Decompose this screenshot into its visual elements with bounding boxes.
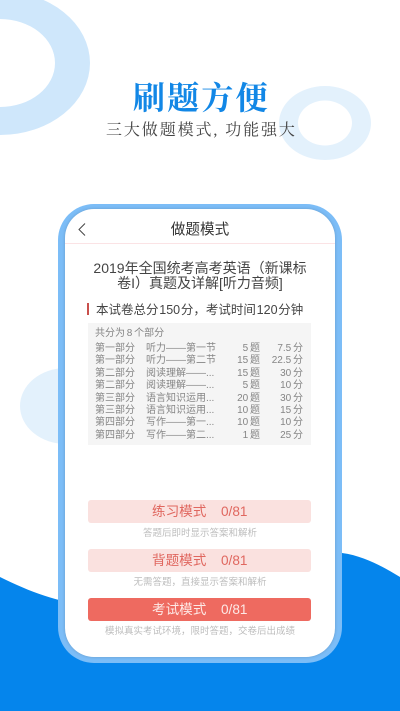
table row 5: 第三部分 <box>95 393 135 404</box>
large ring <box>0 0 90 135</box>
table row 3: 15 题 <box>237 368 260 379</box>
table row 4: 5 题 <box>243 380 260 391</box>
table row 5: 30 分 <box>280 393 303 404</box>
table row 1: 听力——第一节 <box>146 343 216 354</box>
table row 7 <box>95 416 303 428</box>
exam title <box>93 260 307 291</box>
exam mode button <box>88 598 311 621</box>
table row 3 <box>95 367 303 379</box>
header divider <box>65 243 335 244</box>
table row 6 <box>95 404 303 416</box>
table row 4 <box>95 379 303 391</box>
table row 2: 22.5 分 <box>272 355 303 366</box>
practice mode button: 0/81 <box>221 504 247 519</box>
table row 5: 20 题 <box>237 393 260 404</box>
table row 2: 听力——第二节 <box>146 355 216 366</box>
practice mode button <box>88 500 311 523</box>
phone frame <box>58 204 342 663</box>
table row 1 <box>95 342 303 354</box>
score table <box>88 323 311 445</box>
table row 2: 15 题 <box>237 355 260 366</box>
memorize mode button: 背题模式 <box>152 553 206 568</box>
subtitle: 三大做题模式, 功能强大 <box>106 122 297 139</box>
accent bar <box>87 303 89 315</box>
phone screen <box>65 209 335 657</box>
table row 2: 第一部分 <box>95 355 135 366</box>
exam title: 2019年全国统考高考英语（新课标 <box>93 260 307 276</box>
memorize mode button: 0/81 <box>221 553 247 568</box>
table row 1: 第一部分 <box>95 343 135 354</box>
exam mode caption: 模拟真实考试环境，限时答题，交卷后出成绩 <box>105 626 295 637</box>
small ring <box>279 86 371 160</box>
table row 5 <box>95 392 303 404</box>
table row 4: 10 分 <box>280 380 303 391</box>
exam mode button: 0/81 <box>221 602 247 617</box>
blue wave <box>0 552 400 711</box>
back arrow icon <box>78 223 86 236</box>
practice mode button: 练习模式 <box>152 504 206 519</box>
table row 7: 写作——第一... <box>146 417 214 428</box>
memorize mode caption: 无需答题，直接显示答案和解析 <box>133 577 266 588</box>
exam mode button: 考试模式 <box>152 602 206 617</box>
table row 1: 7.5 分 <box>277 343 303 354</box>
table row 4: 阅读理解——... <box>146 380 214 391</box>
screen heading: 做题模式 <box>171 222 229 238</box>
table row 6: 10 题 <box>237 405 260 416</box>
table row 3: 30 分 <box>280 368 303 379</box>
table row 8 <box>95 429 303 441</box>
table row 4: 第二部分 <box>95 380 135 391</box>
pale blob <box>20 368 112 444</box>
table row 8: 1 题 <box>243 430 260 441</box>
table row 1: 5 题 <box>243 343 260 354</box>
table row 8: 第四部分 <box>95 430 135 441</box>
memorize mode button <box>88 549 311 572</box>
table row 5: 语言知识运用... <box>146 393 214 404</box>
exam summary: 本试卷总分 150 分，考试时间 120 分钟 <box>96 303 303 317</box>
table row 8: 写作——第二... <box>146 430 214 441</box>
table row 7: 第四部分 <box>95 417 135 428</box>
table header: 共分为 8 个部分 <box>95 328 164 339</box>
table row 6: 第三部分 <box>95 405 135 416</box>
table row 3: 阅读理解——... <box>146 368 214 379</box>
table row 7: 10 题 <box>237 417 260 428</box>
table row 6: 15 分 <box>280 405 303 416</box>
table row 3: 第二部分 <box>95 368 135 379</box>
table row 8: 25 分 <box>280 430 303 441</box>
table row 2 <box>95 354 303 366</box>
exam title: 卷I）真题及详解[听力音频] <box>117 274 283 290</box>
practice mode caption: 答题后即时显示答案和解析 <box>143 528 257 539</box>
title: 刷题方便 <box>133 80 270 116</box>
table row 7: 10 分 <box>280 417 303 428</box>
table row 6: 语言知识运用... <box>146 405 214 416</box>
